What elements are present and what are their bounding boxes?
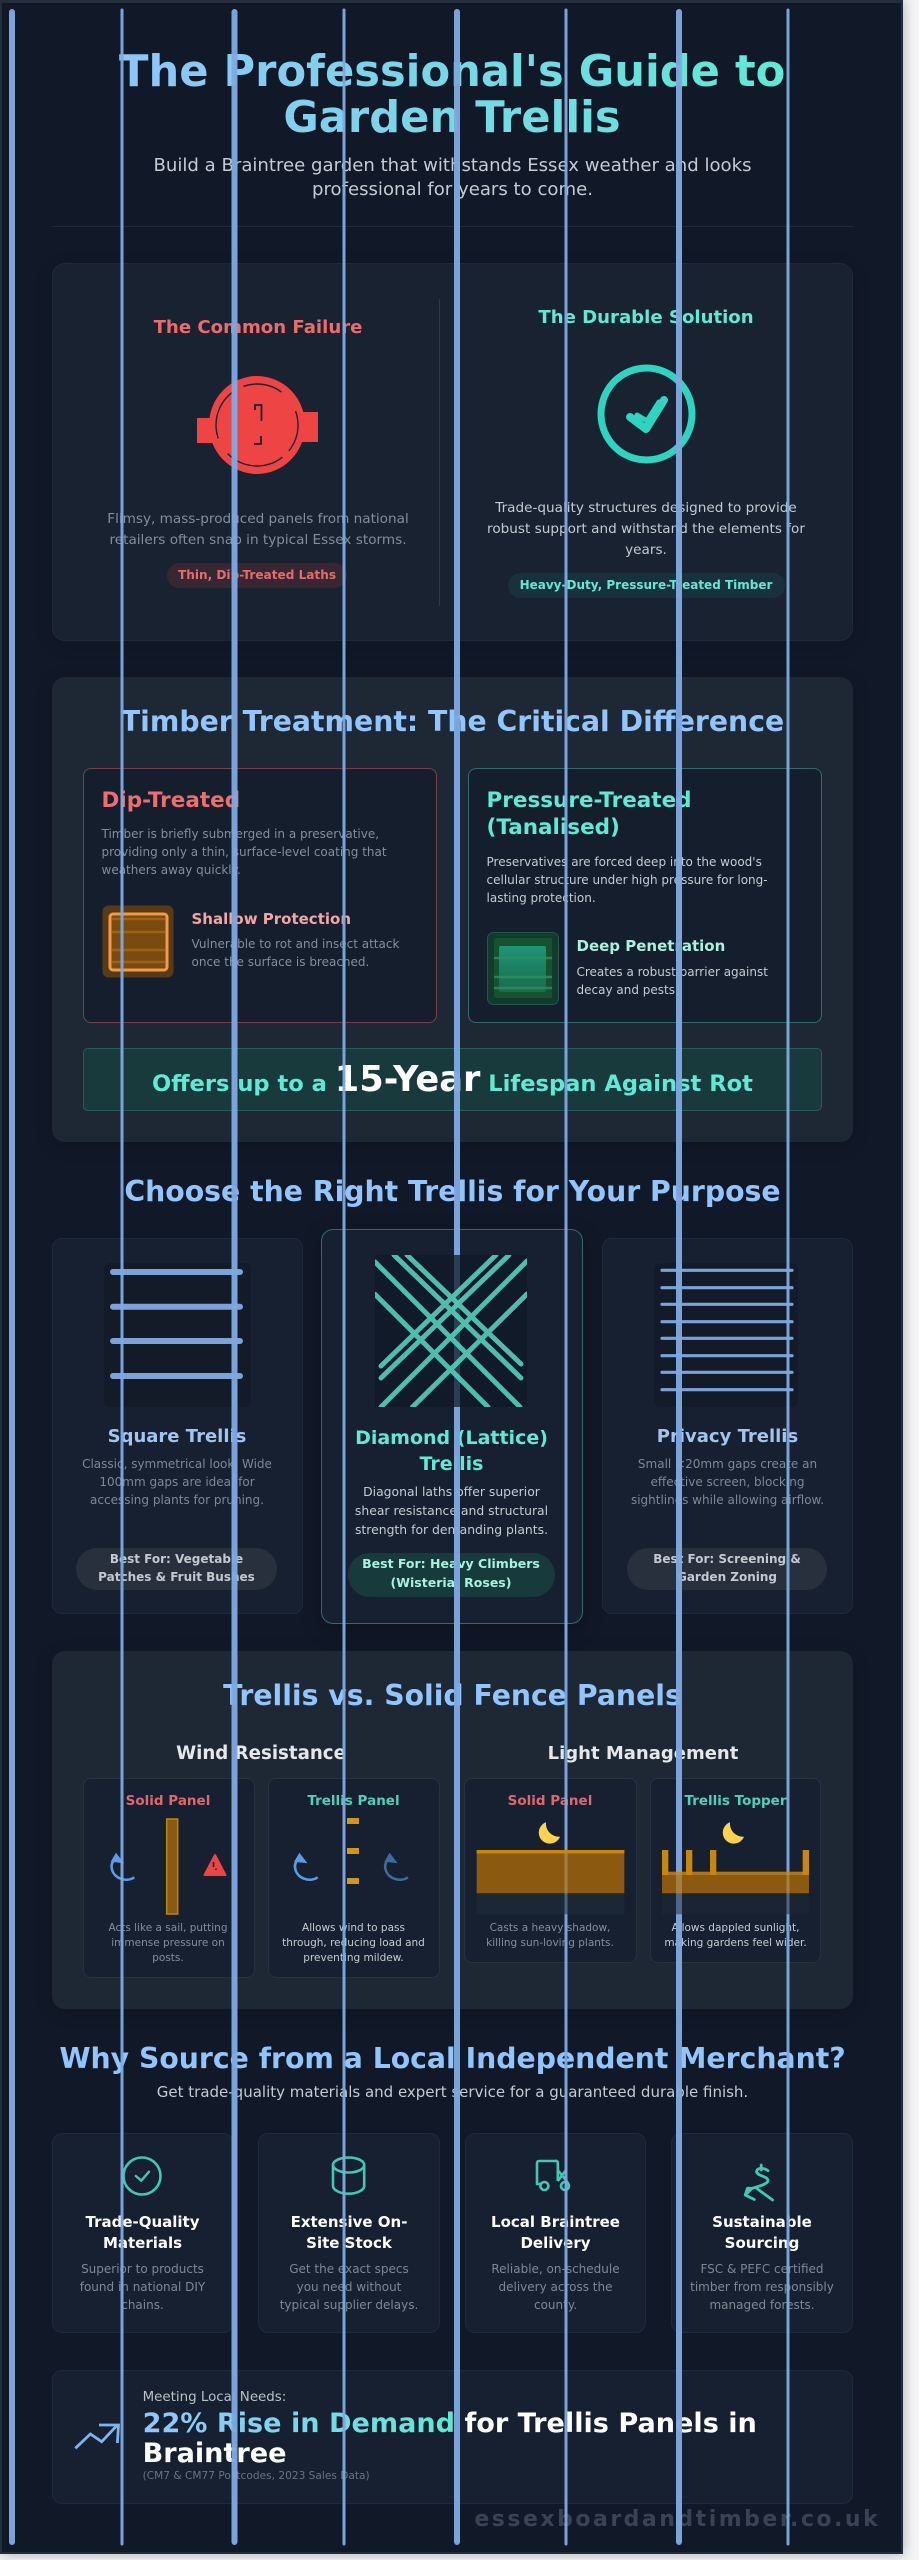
solid panel text: immense pressure on bbox=[111, 1937, 225, 1949]
diagram: sun, trellis topper and dappled light bbox=[662, 1822, 809, 1914]
tag: best for screening: Garden Zoning bbox=[677, 1570, 777, 1584]
text: found in national DIY bbox=[80, 2280, 205, 2294]
card: light solid panel bbox=[464, 1778, 636, 1963]
tag: best for vegetable patches: Patches & Fruit Bushes bbox=[98, 1570, 255, 1584]
shallow protection text bbox=[192, 937, 400, 969]
stat headline: Braintree bbox=[143, 2438, 287, 2469]
trellis panel text: through, reducing load and bbox=[282, 1937, 425, 1949]
title: Trade-Quality bbox=[85, 2213, 200, 2231]
text: durable solution description: Trade-quality structures designed to provide bbox=[495, 500, 797, 516]
solid panel title: Solid Panel bbox=[508, 1793, 592, 1809]
title: Garden Trellis bbox=[283, 93, 621, 143]
tag: best for vegetable patches: Best For: Vegetable bbox=[110, 1552, 243, 1566]
diamond trellis text: strength for demanding plants. bbox=[355, 1522, 548, 1537]
privacy trellis text: effective screen, blocking bbox=[651, 1475, 804, 1489]
trellis panel text: preventing mildew. bbox=[303, 1952, 404, 1964]
diagram: sun, solid fence and heavy shadow bbox=[476, 1822, 624, 1914]
header bbox=[119, 47, 785, 200]
title bbox=[85, 2213, 200, 2252]
shallow protection text: Vulnerable to rot and insect attack bbox=[192, 937, 399, 951]
callout text: Offers up to a 15-Year Lifespan Against Rot bbox=[152, 1059, 753, 1100]
diagram: wind passing through trellis bbox=[294, 1818, 408, 1884]
subtitle: professional for years to come. bbox=[312, 179, 593, 200]
title bbox=[672, 2212, 852, 2254]
stat source: (CM7 & CM77 Postcodes, 2023 Sales Data) bbox=[143, 2470, 370, 2482]
square trellis text bbox=[82, 1457, 272, 1507]
deep penetration heading: Deep Penetration bbox=[576, 937, 725, 955]
dip-treated text bbox=[101, 827, 387, 877]
card: trade-quality materials bbox=[52, 2133, 233, 2333]
dip-treated text: Timber is briefly submerged in a preservative, bbox=[102, 827, 379, 841]
dip-treated text: weathers away quickly. bbox=[102, 863, 241, 877]
solid panel text: Casts a heavy shadow, bbox=[490, 1922, 610, 1934]
text: typical supplier delays. bbox=[280, 2298, 418, 2312]
subtitle: Build a Braintree garden that withstands Essex weather and looks bbox=[153, 155, 752, 176]
text: delivery across the bbox=[498, 2280, 612, 2294]
stat headline: 22% Rise in Demand for Trellis Panels in bbox=[143, 2408, 757, 2439]
card: extensive on-site stock bbox=[258, 2133, 440, 2333]
heading: light management: Light Management bbox=[548, 1743, 738, 1764]
title: Site Stock bbox=[306, 2234, 392, 2252]
text: FSC & PEFC certified bbox=[700, 2262, 824, 2276]
text: durable solution description: robust support and withstand the elements for bbox=[487, 521, 805, 537]
text bbox=[672, 2260, 852, 2314]
title: Local Braintree bbox=[491, 2213, 620, 2231]
diamond trellis title: Trellis bbox=[420, 1453, 483, 1475]
text: chains. bbox=[121, 2298, 164, 2312]
privacy trellis text: sightlines while allowing airflow. bbox=[631, 1493, 824, 1507]
trellis panel text bbox=[282, 1922, 425, 1964]
pressure-treated heading: Pressure-Treated bbox=[486, 788, 692, 812]
icon: check circle bbox=[124, 2156, 162, 2196]
title: Extensive On- bbox=[291, 2213, 407, 2231]
tag: best for heavy climbers: Best For: Heavy Climbers bbox=[362, 1556, 540, 1571]
pressure-treated heading: (Tanalised) bbox=[486, 814, 620, 840]
icon: broken panel warning bbox=[197, 376, 318, 474]
text: county. bbox=[534, 2298, 577, 2312]
text: common failure description: Flimsy, mass-produced panels from national bbox=[107, 511, 409, 527]
icon: sustainable sourcing bbox=[744, 2164, 774, 2202]
privacy trellis text: Small <20mm gaps create an bbox=[638, 1457, 817, 1471]
icon: cylinder bbox=[332, 2156, 366, 2195]
diagram: diamond lattice bbox=[375, 1255, 527, 1407]
square trellis text: 100mm gaps are ideal for bbox=[99, 1475, 255, 1489]
text bbox=[491, 2262, 620, 2312]
text: managed forests. bbox=[709, 2298, 815, 2312]
tag: best for heavy climbers bbox=[348, 1552, 554, 1596]
pressure-treated text: Preservatives are forced deep into the wood's bbox=[486, 855, 762, 869]
solid panel text: killing sun-loving plants. bbox=[486, 1937, 614, 1949]
heading: the durable solution: The Durable Solution bbox=[538, 307, 754, 328]
tag: best for screening bbox=[627, 1548, 827, 1590]
card: local braintree delivery bbox=[465, 2133, 646, 2333]
panel: common failure vs durable solution bbox=[52, 263, 853, 641]
card: pressure-treated bbox=[468, 768, 822, 1023]
diamond trellis text: Diagonal laths offer superior bbox=[363, 1484, 540, 1499]
panel: trellis vs solid fence panels bbox=[52, 1651, 853, 2009]
title: Sustainable bbox=[712, 2213, 812, 2231]
title: Sourcing bbox=[725, 2234, 799, 2252]
icon: trend arrow bbox=[70, 2420, 125, 2454]
deep penetration text: Creates a robust barrier against bbox=[576, 965, 768, 979]
callout: 15-year lifespan bbox=[82, 1048, 822, 1111]
pressure-treated heading bbox=[486, 788, 692, 840]
trellis topper text bbox=[664, 1922, 807, 1949]
privacy trellis title: Privacy Trellis bbox=[657, 1426, 798, 1447]
card: sustainable sourcing bbox=[670, 2133, 853, 2333]
tag: thin dip-treated laths: Thin, Dip-Treated Laths bbox=[178, 568, 336, 582]
text: Reliable, on-schedule bbox=[491, 2262, 620, 2276]
solid panel text bbox=[108, 1922, 228, 1964]
tag: heavy-duty pressure-treated timber: Heavy-Duty, Pressure-Treated Timber bbox=[520, 578, 772, 592]
diagram: wind blocked by solid panel bbox=[110, 1818, 226, 1915]
diagram: privacy trellis bbox=[660, 1268, 794, 1392]
heading: timber treatment: Timber Treatment: The Critical Difference bbox=[121, 705, 784, 738]
solid panel text bbox=[486, 1922, 614, 1949]
diamond trellis title bbox=[355, 1427, 548, 1475]
text: timber from responsibly bbox=[690, 2280, 834, 2294]
tag: best for heavy climbers: (Wisteria, Roses) bbox=[391, 1575, 511, 1590]
section: local merchant bbox=[52, 2042, 853, 2333]
text: durable solution description bbox=[487, 500, 805, 558]
title bbox=[119, 50, 785, 141]
panel: local demand statistic bbox=[52, 2370, 853, 2504]
diamond trellis title: Diamond (Lattice) bbox=[355, 1427, 548, 1449]
text bbox=[80, 2262, 206, 2312]
trellis topper text: Allows dappled sunlight, bbox=[671, 1922, 800, 1934]
text: common failure description bbox=[107, 511, 409, 548]
card: diamond lattice trellis bbox=[320, 1229, 582, 1624]
icon: check circle bbox=[598, 364, 696, 464]
card: light trellis topper bbox=[650, 1778, 821, 1963]
stat label: Meeting Local Needs: bbox=[143, 2390, 286, 2405]
deep penetration text bbox=[576, 965, 768, 997]
text: section intro: Get trade-quality materials and expert service for a guaranteed durable finish. bbox=[157, 2083, 748, 2101]
trellis panel title: Trellis Panel bbox=[307, 1793, 400, 1809]
title: Materials bbox=[103, 2234, 182, 2252]
privacy trellis text bbox=[631, 1457, 824, 1507]
icon: delivery truck bbox=[536, 2160, 570, 2192]
square trellis title: Square Trellis bbox=[108, 1426, 246, 1447]
title bbox=[491, 2213, 620, 2252]
tag: thin dip-treated laths bbox=[167, 562, 347, 588]
text bbox=[280, 2262, 418, 2312]
square trellis text: accessing plants for pruning. bbox=[90, 1493, 264, 1507]
heading: choose the right trellis: Choose the Right Trellis for Your Purpose bbox=[124, 1175, 781, 1208]
diamond trellis text: shear resistance and structural bbox=[355, 1503, 548, 1518]
pressure-treated text: lasting protection. bbox=[486, 891, 596, 905]
dip-treated text: providing only a thin, surface-level coating that bbox=[102, 845, 387, 859]
pressure-treated text bbox=[486, 855, 768, 905]
heading: wind resistance: Wind Resistance bbox=[176, 1743, 346, 1764]
pressure-treated text: cellular structure under high pressure for long- bbox=[486, 873, 768, 887]
card: square trellis bbox=[52, 1238, 302, 1614]
icon: deep penetration timber section bbox=[487, 932, 559, 1005]
tag: best for vegetable patches bbox=[76, 1548, 277, 1590]
card: wind solid panel bbox=[82, 1778, 255, 1978]
solid panel text: posts. bbox=[152, 1952, 184, 1964]
shallow protection heading: Shallow Protection bbox=[192, 910, 351, 928]
diamond trellis text bbox=[355, 1484, 548, 1537]
heading: trellis vs solid: Trellis vs. Solid Fence Panels bbox=[223, 1679, 682, 1712]
stat headline bbox=[143, 2409, 757, 2468]
text: durable solution description: years. bbox=[625, 542, 667, 558]
trellis topper title: Trellis Topper bbox=[684, 1793, 786, 1809]
heading: why source local: Why Source from a Local Independent Merchant? bbox=[59, 2042, 846, 2075]
card: privacy trellis bbox=[602, 1238, 853, 1614]
card: dip-treated bbox=[82, 768, 436, 1023]
tag: heavy-duty pressure-treated timber bbox=[508, 573, 784, 598]
solid panel title: Solid Panel bbox=[126, 1793, 210, 1809]
text: Get the exact specs bbox=[289, 2262, 409, 2276]
title bbox=[291, 2213, 407, 2252]
panel: timber treatment bbox=[52, 677, 853, 1142]
card: wind trellis panel bbox=[268, 1778, 440, 1978]
text: you need without bbox=[297, 2280, 401, 2294]
text: common failure description: retailers often snap in typical Essex storms. bbox=[109, 532, 407, 548]
dip-treated heading: Dip-Treated bbox=[102, 788, 240, 812]
shallow protection text: once the surface is breached. bbox=[192, 955, 369, 969]
text: Superior to products bbox=[81, 2262, 204, 2276]
trellis topper text: making gardens feel wider. bbox=[664, 1937, 807, 1949]
solid panel text: Acts like a sail, putting bbox=[108, 1922, 228, 1934]
title: The Professional's Guide to bbox=[119, 47, 785, 97]
deep penetration text: decay and pests. bbox=[576, 983, 679, 997]
heading: the common failure: The Common Failure bbox=[154, 317, 362, 338]
watermark: essexboardandtimber.co.uk bbox=[474, 2507, 880, 2532]
icon: shallow protection timber section bbox=[102, 906, 174, 978]
diagram: square trellis bbox=[110, 1269, 243, 1379]
title: Delivery bbox=[520, 2234, 591, 2252]
square trellis text: Classic, symmetrical look. Wide bbox=[82, 1457, 272, 1471]
subtitle bbox=[153, 155, 752, 200]
tag: best for screening: Best For: Screening & bbox=[653, 1552, 801, 1566]
trellis panel text: Allows wind to pass bbox=[302, 1922, 405, 1934]
